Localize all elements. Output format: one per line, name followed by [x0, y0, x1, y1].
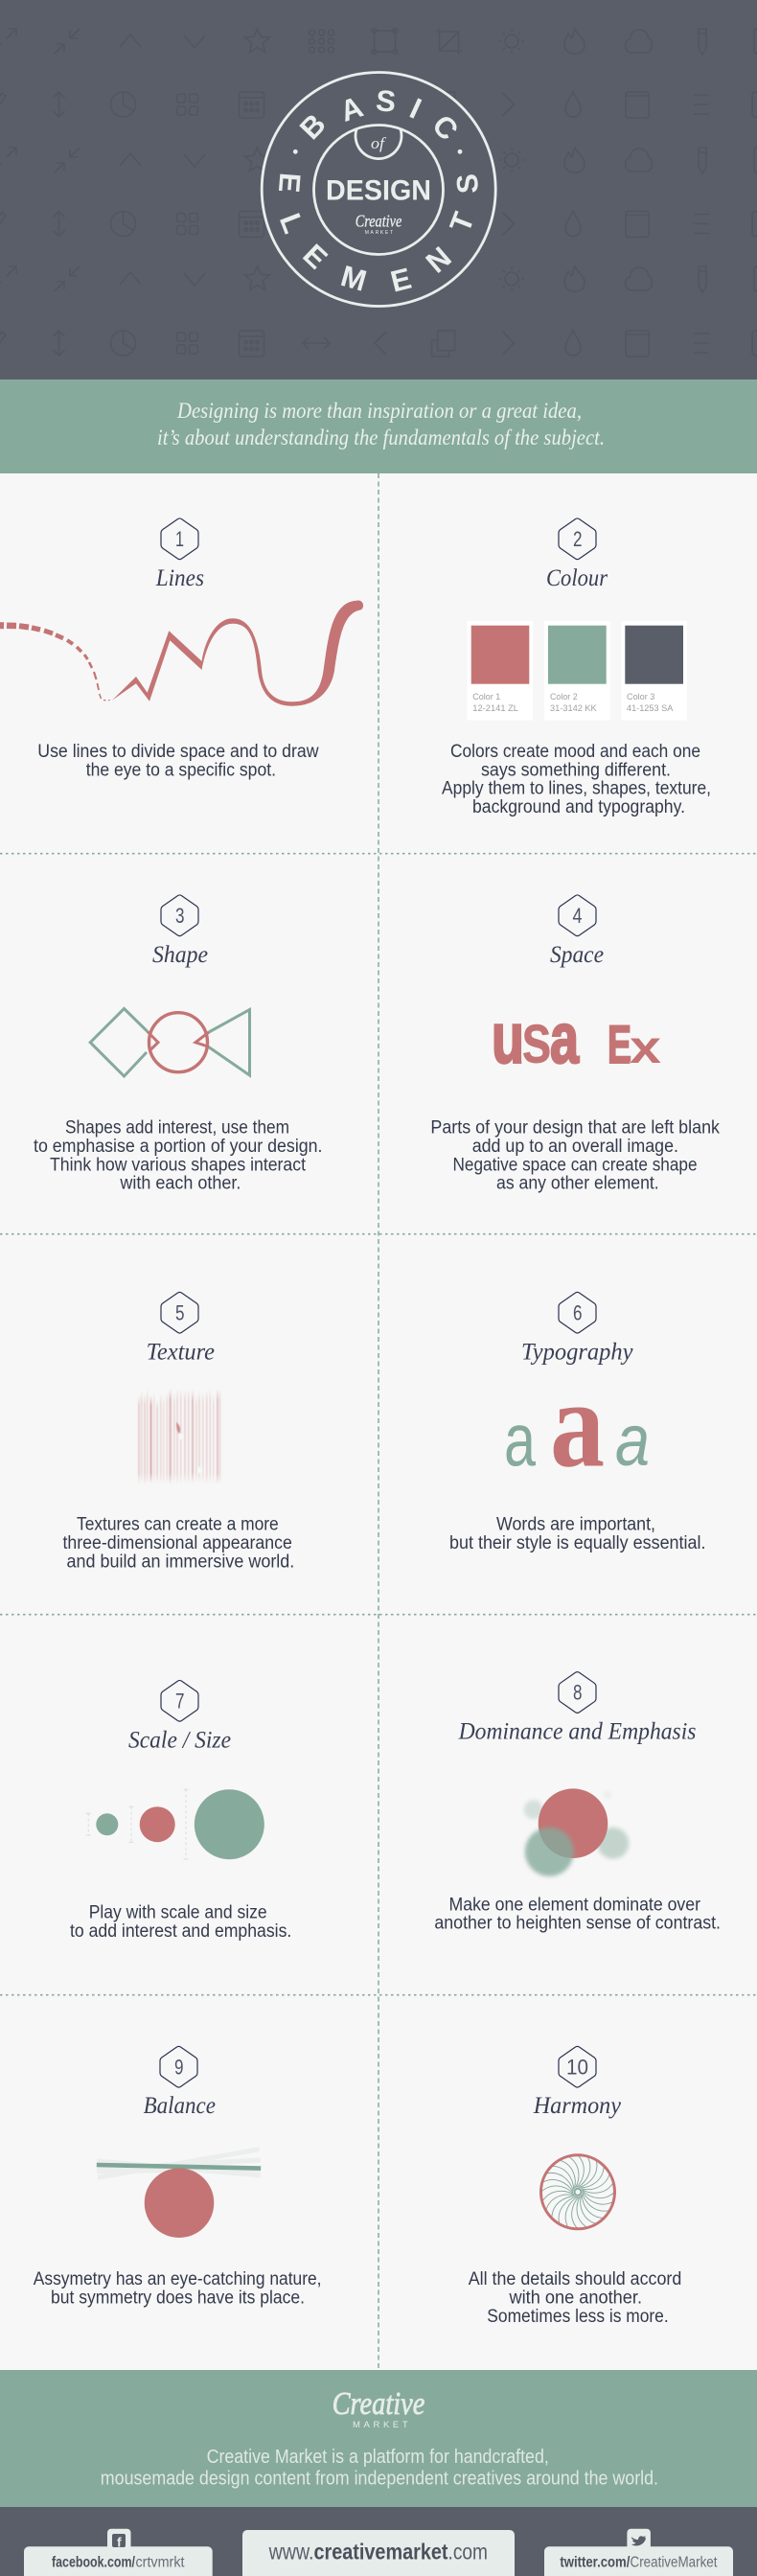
illustration: letter a variations: a	[550, 1355, 605, 1493]
tapered line	[112, 601, 363, 706]
number badge 6	[559, 1292, 596, 1333]
word: ELEMENTS: L	[273, 209, 310, 238]
description: space	[430, 1118, 720, 1194]
illustration: letter a variations: a	[615, 1400, 650, 1482]
illustration: negative space logos: u	[492, 999, 524, 1078]
number badge 3	[161, 895, 198, 936]
title badge	[262, 73, 495, 307]
swatch 1	[468, 621, 533, 721]
badge logo	[356, 212, 401, 236]
panel: shape	[34, 895, 322, 1194]
intro banner	[0, 380, 757, 473]
twitter link: twitter.com/	[560, 2555, 631, 2571]
description: colour: says something different.	[481, 760, 671, 780]
description: lines: Use lines to divide space and to draw	[37, 742, 319, 762]
illustration: letter a variations	[504, 1355, 650, 1493]
illustration: dominant circle	[524, 1788, 629, 1876]
swatch 2: 31-3142 KK	[550, 703, 597, 714]
word: BASIC: A	[336, 90, 367, 128]
number badge 5: 5	[175, 1301, 184, 1324]
panel: texture	[63, 1292, 294, 1572]
intro text	[157, 399, 605, 449]
description: dominance: Make one element dominate over	[448, 1895, 701, 1915]
description: typography: Words are important,	[496, 1515, 655, 1535]
description: harmony	[469, 2269, 681, 2327]
illustration: negative space logos: a	[550, 999, 580, 1078]
description: colour	[442, 742, 711, 817]
number badge 9	[160, 2046, 197, 2087]
word: ELEMENTS	[272, 172, 485, 299]
description: harmony: with one another.	[509, 2288, 642, 2308]
intro text: Designing is more than inspiration or a great idea,	[176, 399, 582, 423]
heading: Lines: Lines	[155, 565, 204, 591]
number badge 6: 6	[573, 1301, 583, 1324]
footer description	[101, 2447, 658, 2489]
description: texture: Textures can create a more	[77, 1515, 279, 1535]
footer links	[0, 2507, 757, 2576]
description: lines: the eye to a specific spot.	[86, 760, 276, 780]
heading: Dominance and Emphasis: Dominance and Emphasis	[458, 1719, 696, 1745]
description: colour: Colors create mood and each one	[450, 742, 700, 762]
swatch 2	[544, 621, 610, 721]
description: space: Negative space can create shape	[452, 1155, 698, 1175]
swatch 3: 41-1253 SA	[627, 703, 674, 714]
twitter link: CreativeMarket	[631, 2555, 718, 2571]
description: space: add up to an overall image.	[472, 1137, 678, 1157]
panel: balance	[34, 2046, 322, 2308]
heading: Texture: Texture	[147, 1339, 215, 1365]
word: of: of	[371, 134, 386, 152]
word: BASIC: I	[405, 91, 426, 126]
badge rings	[262, 73, 495, 307]
number badge 7: 7	[175, 1689, 184, 1714]
intro text: it’s about understanding the fundamentals of the subject.	[157, 426, 605, 449]
facebook link: crtvmrkt	[136, 2555, 185, 2571]
swatch 3	[621, 621, 687, 721]
number badge 8	[559, 1672, 596, 1713]
illustration: negative space logos: E	[608, 1014, 631, 1074]
number badge 9: 9	[174, 2055, 184, 2080]
heading: Scale / Size: Scale / Size	[128, 1727, 231, 1753]
number badge 10: 10	[566, 2055, 588, 2080]
description: balance: but symmetry does have its place.	[51, 2288, 305, 2308]
description: texture: and build an immersive world.	[67, 1552, 294, 1572]
word: ELEMENTS: E	[296, 238, 334, 275]
description: typography: but their style is equally essential.	[449, 1533, 705, 1553]
illustration: letter a variations: a	[504, 1397, 536, 1482]
word: BASIC	[293, 83, 465, 147]
description: shape: Think how various shapes interact	[50, 1155, 307, 1175]
swatch 1: 12-2141 ZL	[472, 703, 518, 714]
word: ELEMENTS: M	[337, 259, 370, 298]
word: ELEMENTS: E	[387, 262, 415, 299]
panel: harmony	[469, 2046, 681, 2327]
description: scale	[70, 1903, 291, 1942]
website link	[242, 2530, 515, 2576]
number badge 4: 4	[573, 904, 583, 928]
number badge 2	[559, 518, 596, 560]
illustration: negative space logos	[492, 999, 661, 1078]
badge logo: MARKET	[365, 230, 393, 236]
illustration: shapes	[90, 1008, 249, 1076]
panel: dominance	[434, 1672, 721, 1934]
footer logo: Creative	[333, 2386, 424, 2422]
word: BASIC: B	[293, 107, 333, 146]
number badge 7	[161, 1680, 198, 1721]
number badge 10	[559, 2046, 596, 2087]
heading: Space: Space	[550, 942, 604, 968]
description: texture	[63, 1515, 294, 1572]
heading: Typography: Typography	[521, 1339, 633, 1365]
number badge 1	[161, 518, 198, 560]
heading: Harmony: Harmony	[533, 2093, 622, 2119]
website link: .com	[448, 2540, 488, 2564]
illustration: lines	[0, 601, 363, 706]
illustration: scaled circles	[86, 1789, 264, 1859]
badge logo: Creative	[356, 212, 401, 231]
footer banner	[0, 2370, 757, 2507]
illustration: spoked wheel	[540, 2154, 615, 2229]
description: scale: Play with scale and size	[89, 1903, 267, 1923]
heading: Colour: Colour	[546, 565, 608, 591]
number badge 3: 3	[175, 904, 184, 928]
word: ELEMENTS: S	[450, 172, 485, 195]
description: shape: with each other.	[119, 1174, 241, 1194]
description: texture: three-dimensional appearance	[63, 1533, 292, 1553]
word: ELEMENTS: N	[420, 241, 458, 280]
panel: scale	[70, 1680, 291, 1942]
description: scale: to add interest and emphasis.	[70, 1921, 291, 1942]
word: ELEMENTS: T	[443, 208, 481, 237]
badge dots	[293, 150, 462, 154]
facebook link: f	[117, 2534, 122, 2549]
word: DESIGN: DESIGN	[326, 174, 431, 206]
description: harmony: All the details should accord	[469, 2269, 681, 2289]
illustration: balanced beam	[97, 2147, 261, 2238]
number badge 4	[559, 895, 596, 936]
number badge 5	[161, 1292, 198, 1333]
description: lines	[37, 742, 319, 780]
header background	[0, 0, 757, 380]
description: colour: background and typography.	[472, 797, 685, 817]
heading: Balance: Balance	[144, 2093, 216, 2119]
description: dominance: another to heighten sense of contrast.	[434, 1914, 721, 1934]
footer links background	[0, 2507, 757, 2576]
illustration: negative space logos: s	[521, 999, 552, 1078]
number badge 8: 8	[573, 1681, 583, 1704]
website link: www.	[268, 2540, 314, 2564]
facebook link: facebook.com/	[52, 2555, 136, 2571]
description: typography	[449, 1515, 705, 1553]
description: shape: Shapes add interest, use them	[65, 1118, 289, 1138]
panel: colour	[442, 518, 711, 817]
illustration: negative space logos: x	[630, 1023, 661, 1073]
footer logo: MARKET	[353, 2420, 408, 2430]
footer logo	[333, 2386, 424, 2430]
description: balance	[34, 2269, 322, 2308]
swatch 3: Color 3	[627, 692, 654, 702]
footer banner background	[0, 2370, 757, 2507]
twitter link	[544, 2529, 733, 2576]
footer description: mousemade design content from independent creatives around the world.	[101, 2468, 658, 2489]
description: space: as any other element.	[496, 1174, 659, 1194]
swatch 2: Color 2	[550, 692, 578, 702]
icon pattern	[0, 28, 757, 356]
description: colour: Apply them to lines, shapes, texture,	[442, 779, 711, 799]
panel: typography	[449, 1292, 705, 1553]
description: shape: to emphasise a portion of your design.	[34, 1137, 322, 1157]
illustration: wood texture	[138, 1389, 220, 1485]
facebook link	[24, 2529, 213, 2576]
panel: lines	[0, 518, 363, 780]
word: ELEMENTS: E	[272, 172, 307, 194]
description: dominance	[434, 1895, 721, 1934]
description: space: Parts of your design that are left blank	[430, 1118, 720, 1138]
word: BASIC: S	[375, 83, 397, 119]
number badge 1: 1	[175, 527, 184, 551]
number badge 2: 2	[573, 527, 583, 551]
description: balance: Assymetry has an eye-catching nature,	[34, 2269, 322, 2289]
heading: Shape: Shape	[152, 942, 208, 968]
description: harmony: Sometimes less is more.	[487, 2307, 669, 2327]
word: BASIC: C	[425, 108, 465, 147]
panel: space	[430, 895, 720, 1194]
banner background	[0, 380, 757, 473]
description: shape	[34, 1118, 322, 1194]
website link: creativemarket	[314, 2540, 448, 2564]
footer description: Creative Market is a platform for handcrafted,	[207, 2447, 549, 2468]
dashed curve	[0, 626, 110, 701]
swatch 1: Color 1	[472, 692, 500, 702]
header panel	[0, 0, 757, 380]
